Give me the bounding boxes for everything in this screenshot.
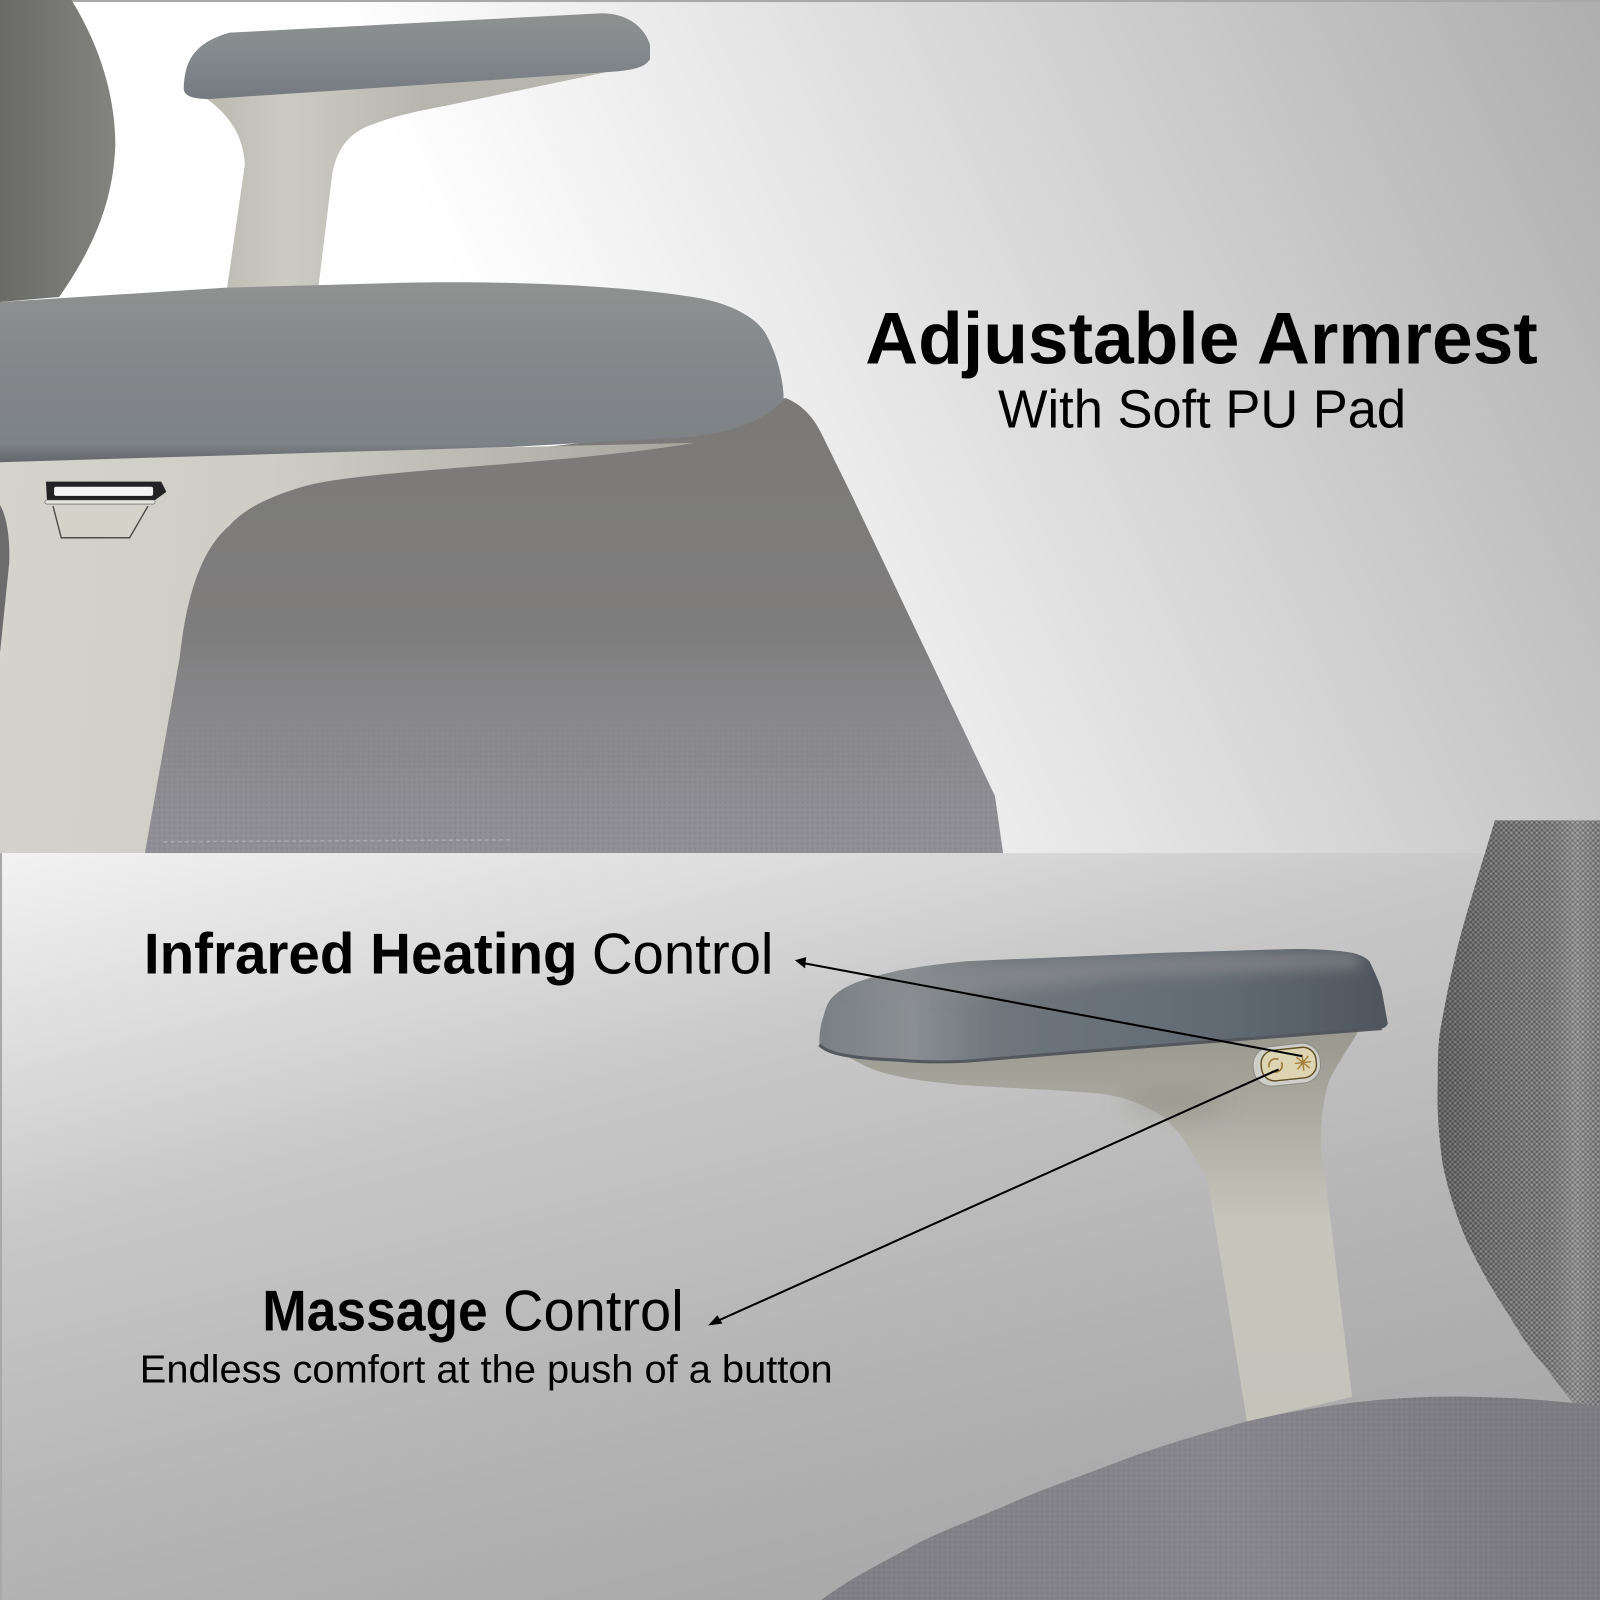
seat fabric texture bbox=[148, 782, 1002, 853]
background: upper panel gradient bbox=[0, 0, 1600, 853]
label: massage control: Control bbox=[503, 1280, 684, 1344]
label: massage control bbox=[262, 1280, 684, 1344]
chair back, top left bbox=[0, 0, 115, 302]
upper armrest stem bbox=[204, 68, 624, 292]
mesh shading bbox=[1437, 820, 1600, 1410]
subtitle: With Soft PU Pad bbox=[998, 380, 1406, 440]
chrome lever bbox=[45, 482, 166, 538]
button gold face bbox=[1260, 1046, 1318, 1082]
left border strip bbox=[0, 853, 2, 1600]
massage description: Endless comfort at the push of a button bbox=[140, 1349, 833, 1392]
control button bbox=[1251, 1041, 1322, 1088]
mesh chair back bbox=[1437, 820, 1600, 1410]
background: lower panel gradient bbox=[0, 853, 1600, 1600]
label: infrared heating control: Infrared Heating bbox=[144, 922, 578, 986]
lever paddle edges bbox=[53, 506, 148, 538]
photo: top armrest close-up bbox=[0, 0, 1003, 853]
seat cushion bbox=[821, 1397, 1600, 1600]
seat back behind large armrest bbox=[145, 398, 1003, 853]
arrow: massage bbox=[708, 1069, 1279, 1326]
seat weave texture bbox=[821, 1397, 1600, 1600]
photo: lower armrest with controls bbox=[819, 820, 1600, 1600]
armrest pad highlight band bbox=[953, 949, 1364, 994]
lever chrome bar bbox=[46, 482, 166, 500]
upper armrest pad bbox=[184, 13, 650, 99]
armrest pad bbox=[819, 949, 1388, 1062]
arrow: infrared heating bbox=[795, 957, 1302, 1056]
large armrest pad bbox=[0, 282, 784, 462]
upper border strip bbox=[0, 0, 1600, 2]
arm inner shadow bbox=[1122, 1088, 1224, 1116]
title: Adjustable Armrest bbox=[865, 296, 1538, 379]
dark gap at left edge bbox=[0, 505, 9, 653]
armrest pad lower lip bbox=[819, 1029, 1382, 1062]
lower arm and stem bbox=[847, 1027, 1361, 1421]
lever paddle bbox=[53, 505, 148, 538]
massage icon bbox=[1268, 1058, 1283, 1073]
button silver bezel bbox=[1251, 1041, 1322, 1088]
label: massage control: Massage bbox=[262, 1280, 488, 1344]
heating icon bbox=[1294, 1054, 1312, 1072]
label: infrared heating control: Control bbox=[592, 922, 773, 986]
seat stitching bbox=[163, 840, 510, 842]
large arm support bbox=[0, 443, 694, 853]
label: infrared heating control bbox=[144, 922, 773, 986]
